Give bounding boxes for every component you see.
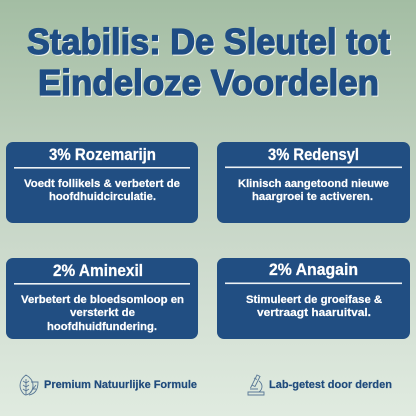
text: Aminexil description	[21, 294, 184, 333]
text: Rozemarijn description: hoofdhuidcirculatie.	[49, 191, 156, 203]
panel: 2% Aminexil	[6, 258, 198, 339]
text: Anagain description: Stimuleert de groeifase &	[246, 294, 382, 306]
title: Eindeloze Voordelen	[39, 63, 380, 104]
panel: 3% Redensyl	[217, 142, 410, 223]
text: Lab-getest door derden: Lab-getest door derden	[269, 379, 392, 391]
text: Redensyl description: haargroei te activeren.	[252, 191, 373, 203]
text: Premium Natuurlijke Formule: Premium Natuurlijke Formule	[44, 379, 197, 391]
panel: 2% Anagain	[217, 258, 410, 339]
text: Redensyl description	[238, 178, 389, 203]
icon: microscope	[248, 375, 264, 395]
icon: leaves	[20, 375, 38, 395]
text: Aminexil description: versterkt de	[70, 307, 135, 319]
text: Rozemarijn description: Voedt follikels & verbetert de	[24, 178, 180, 190]
heading: 2% Anagain: 2% Anagain	[269, 261, 358, 279]
title	[27, 21, 391, 104]
text: Anagain description: vertraagt haaruitval.	[257, 307, 371, 319]
title: Eindeloze Voordelen	[38, 62, 379, 103]
text: Redensyl description: Klinisch aangetoond nieuwe	[238, 178, 389, 190]
title: Stabilis: De Sleutel tot	[28, 22, 391, 63]
heading: 2% Aminexil: 2% Aminexil	[53, 262, 143, 280]
text: Rozemarijn description	[24, 178, 180, 203]
heading: 3% Redensyl: 3% Redensyl	[268, 146, 359, 164]
panel: 3% Rozemarijn	[6, 142, 198, 223]
title: Stabilis: De Sleutel tot	[27, 21, 390, 62]
text: Aminexil description: hoofdhuidfundering.	[47, 321, 157, 333]
text: Anagain description	[246, 294, 382, 319]
text: Aminexil description: Verbetert de bloedsomloop en	[21, 294, 184, 306]
heading: 3% Rozemarijn: 3% Rozemarijn	[49, 146, 156, 164]
